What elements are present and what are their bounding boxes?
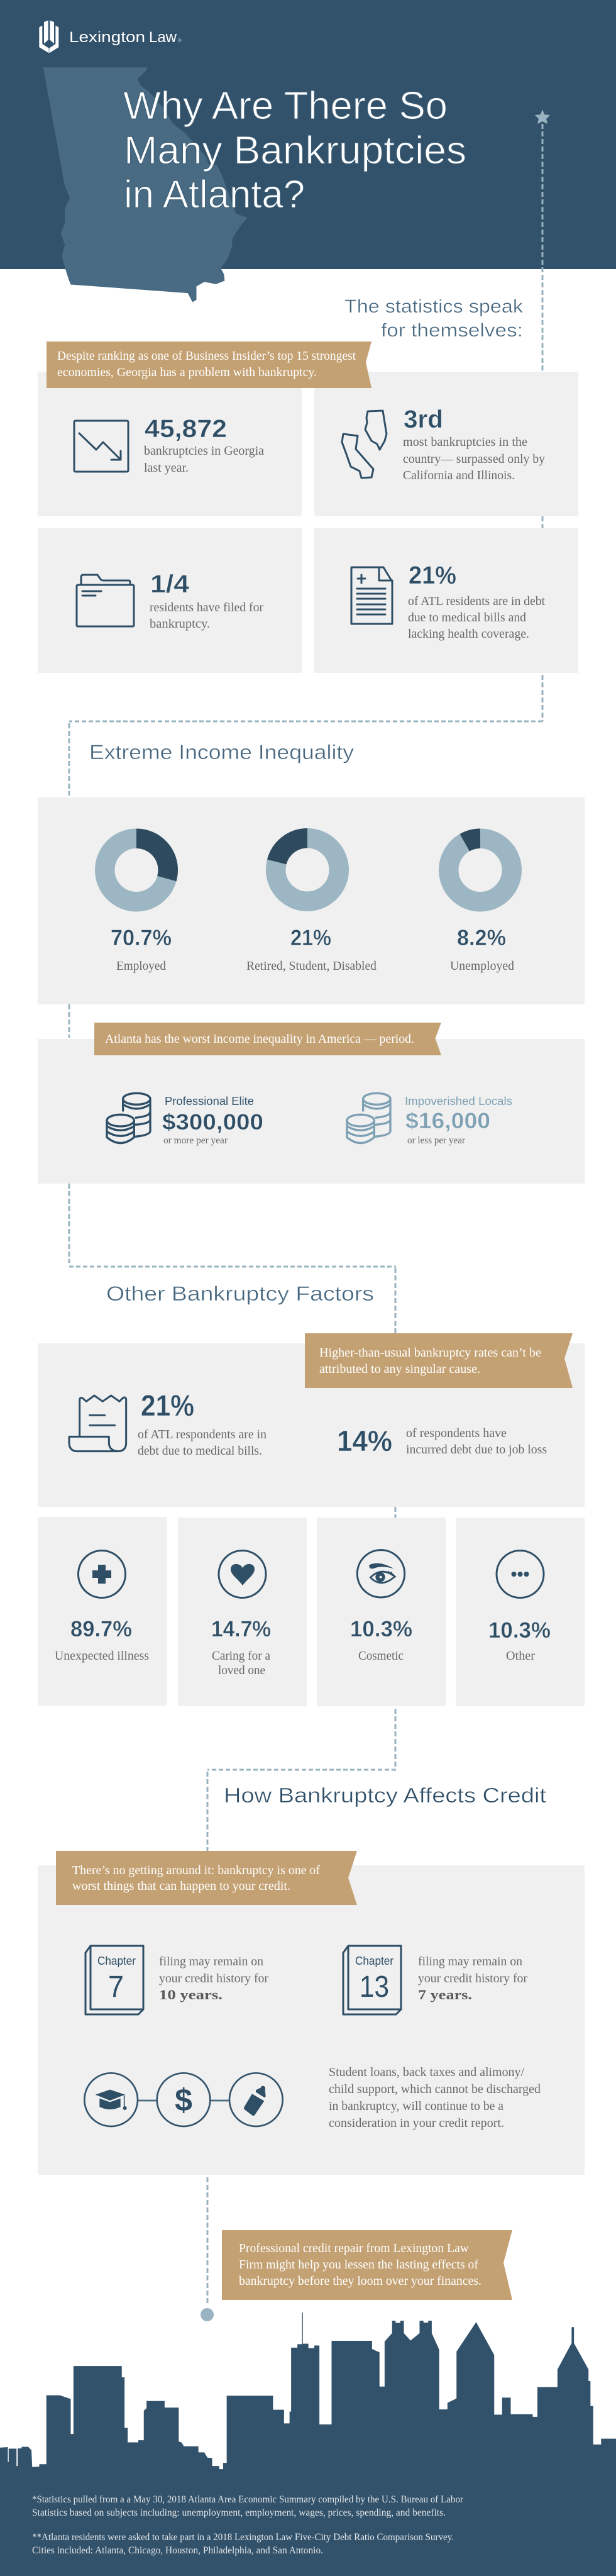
text: Impoverished Locals: Impoverished Locals	[405, 1095, 512, 1108]
callout: no singular cause	[305, 1333, 573, 1388]
heading: statistics speak	[344, 296, 524, 341]
card: caring for a loved one: loved one	[218, 1663, 265, 1677]
text: most bankruptcies: most bankruptcies in the	[403, 435, 527, 449]
card: cosmetic: 10.3%	[350, 1617, 412, 1641]
text: job loss: incurred debt due to job loss	[406, 1443, 547, 1457]
panel: medical debt stat	[314, 528, 578, 673]
icons: student loans, taxes, child support	[84, 2073, 283, 2126]
title: Why Are There So	[123, 84, 448, 128]
callout: professional credit repair: Professional credit repair from Lexington Law	[239, 2241, 469, 2255]
title: in Atlanta?	[124, 173, 305, 216]
card: unexpected illness: 89.7%	[70, 1617, 132, 1641]
stat: 21% medical: 21%	[141, 1389, 194, 1422]
callout: worst thing for credit: worst things that can happen to your credit.	[72, 1879, 290, 1893]
text: chapter 7 duration: 10 years.	[159, 1987, 223, 2002]
stat: 14% job loss: 14%	[337, 1424, 392, 1457]
card: cosmetic	[317, 1518, 446, 1706]
icon: chapter 7 book: 7	[108, 1970, 124, 2004]
stat: 21%: 21%	[409, 562, 456, 589]
text: most bankruptcies: country— surpassed only by	[403, 452, 546, 466]
text: residents in debt: due to medical bills and	[408, 611, 526, 625]
text: debts not discharged: in bankruptcy, will continue to be a	[329, 2099, 503, 2113]
text: Impoverished Locals: or less per year	[407, 1135, 466, 1146]
card: other	[456, 1518, 585, 1706]
heading: statistics speak: The statistics speak	[344, 296, 524, 317]
callout: professional credit repair	[222, 2230, 512, 2300]
text: job loss: of respondents have	[406, 1426, 507, 1440]
callout: no singular cause: Higher-than-usual bankruptcy rates can’t be	[319, 1346, 541, 1360]
stat: 21% retired: Retired, Student, Disabled	[246, 959, 377, 973]
text: debts not discharged: consideration in your credit report.	[329, 2116, 504, 2130]
stat: 1/4: 1/4	[150, 570, 190, 598]
footnotes: **Atlanta residents were asked to take part in a 2018 Lexington Law Five-City Debt Ratio Comparison Survey.	[32, 2532, 454, 2543]
donut chart: employed	[105, 838, 168, 902]
icon: receipt	[69, 1396, 126, 1452]
text: residents in debt: lacking health coverage.	[408, 627, 529, 641]
text: medical bills	[138, 1428, 267, 1458]
stat: 70.7% employed: Employed	[116, 959, 166, 973]
text: bankruptcies in Georgia: last year.	[144, 461, 189, 475]
stat: 21% retired	[246, 926, 377, 973]
stat: 8.2% unemployed	[450, 926, 514, 973]
callout: worst income inequality: Atlanta has the worst income inequality in America — period.	[105, 1032, 414, 1046]
logo: Lexington Law	[39, 20, 182, 53]
callout: Georgia has a problem	[47, 341, 371, 388]
footnotes: Cities included: Atlanta, Chicago, Houston, Philadelphia, and San Antonio.	[32, 2545, 323, 2556]
panel: employment donuts	[38, 797, 585, 1004]
icon: star	[535, 109, 550, 124]
text: most bankruptcies	[403, 435, 546, 482]
stat: 8.2% unemployed: 8.2%	[457, 926, 506, 950]
text: job loss	[406, 1426, 547, 1457]
callout: no singular cause: attributed to any singular cause.	[319, 1362, 480, 1376]
text: chapter 7 duration	[159, 1955, 268, 2002]
stat: 8.2% unemployed: Unemployed	[450, 959, 514, 973]
panel: credit effects	[38, 1865, 585, 2175]
title: Many Bankruptcies	[124, 129, 466, 172]
callout: worst income inequality	[94, 1023, 441, 1055]
icon: medical document	[351, 567, 392, 624]
text: chapter 7 duration: filing may remain on	[159, 1955, 263, 1968]
panel: one in four residents	[38, 528, 302, 673]
text: residents have filed	[150, 601, 263, 631]
map of Georgia	[43, 67, 248, 302]
card: caring for a loved one: 14.7%	[211, 1617, 271, 1641]
text: bankruptcies in Georgia	[144, 444, 264, 475]
icon: chapter 13 book	[343, 1946, 401, 2014]
text: bankruptcies in Georgia: bankruptcies in Georgia	[144, 444, 264, 458]
footnotes: *Statistics pulled from a a May 30, 2018 Atlanta Area Economic Summary compiled by the U.S. Bureau of Labor	[32, 2494, 464, 2505]
logo: Lexington Law: Lexington	[69, 29, 145, 46]
icon: Illinois and California	[342, 411, 387, 478]
icon: chapter 7 book	[85, 1946, 143, 2014]
icon: falling chart	[74, 421, 128, 472]
text: debts not discharged: child support, which cannot be discharged	[329, 2082, 541, 2096]
stat: 21% retired: 21%	[290, 926, 331, 950]
text: Professional Elite: or more per year	[163, 1135, 228, 1146]
donut chart: unemployed	[449, 838, 512, 902]
text: Professional Elite	[162, 1095, 263, 1146]
callout: Georgia has a problem: economies, Georgia has a problem with bankruptcy.	[57, 365, 317, 379]
text: debts not discharged	[329, 2065, 541, 2130]
icon: three dots	[497, 1551, 544, 1597]
card: other: Other	[506, 1649, 535, 1663]
card: cosmetic: Cosmetic	[358, 1649, 404, 1663]
card: unexpected illness	[38, 1517, 167, 1706]
card: caring for a loved one: Caring for a	[212, 1649, 270, 1663]
footnotes: Statistics based on subjects including: unemployment, employment, wages, prices, spending, and benefits.	[32, 2507, 446, 2518]
text: medical bills: debt due to medical bills.	[138, 1444, 262, 1458]
text: residents have filed: residents have filed for	[150, 601, 263, 614]
text: residents in debt: of ATL residents are in debt	[408, 594, 545, 608]
text: Professional Elite: $300,000	[162, 1110, 263, 1135]
text: Impoverished Locals: $16,000	[405, 1109, 490, 1133]
text: medical bills: of ATL respondents are in	[138, 1428, 267, 1441]
footnotes	[32, 2494, 464, 2556]
callout: professional credit repair: Firm might help you lessen the lasting effects of	[239, 2258, 478, 2272]
icons: student loans, taxes, child support: $	[175, 2083, 192, 2118]
icon: eye	[357, 1550, 405, 1597]
text: residents in debt	[408, 594, 545, 641]
icon: chapter 13 book: 13	[360, 1970, 389, 2004]
stat: 45,872: 45,872	[145, 415, 227, 443]
text: chapter 13 duration: your credit history for	[418, 1972, 527, 1985]
stat: 70.7% employed	[111, 926, 172, 973]
card: caring for a loved one	[178, 1518, 307, 1706]
donut chart: retired, student, disabled	[276, 838, 339, 901]
icon: chapter 7 book: Chapter	[97, 1955, 136, 1967]
header background	[0, 0, 616, 269]
stat: 3rd: 3rd	[404, 406, 443, 433]
panel: medical bills and job loss	[38, 1343, 585, 1507]
text: chapter 13 duration: filing may remain on	[418, 1955, 522, 1968]
panel: income comparison	[38, 1039, 585, 1184]
icon: end dot	[201, 2308, 214, 2321]
heading: statistics speak: for themselves:	[381, 320, 523, 341]
Atlanta skyline footer	[0, 2312, 616, 2576]
heading: Extreme Income Inequality: Extreme Income Inequality	[89, 741, 354, 763]
text: residents have filed: bankruptcy.	[150, 617, 210, 631]
text: debts not discharged: Student loans, back taxes and alimony/	[329, 2065, 524, 2079]
icon: coins light	[347, 1093, 390, 1143]
text: chapter 7 duration: your credit history for	[159, 1972, 268, 1985]
stat: 70.7% employed: 70.7%	[111, 926, 172, 950]
icon: chapter 13 book: Chapter	[355, 1955, 393, 1967]
text: chapter 13 duration	[418, 1955, 527, 2002]
card: other: 10.3%	[488, 1618, 551, 1643]
text: most bankruptcies: California and Illinois.	[403, 469, 515, 482]
icon: folder	[77, 575, 134, 626]
panel: Georgia bankruptcies stat	[38, 372, 302, 516]
callout: worst thing for credit	[56, 1851, 357, 1905]
dashed path connecting the sections	[69, 124, 542, 2303]
callout: Georgia has a problem: Despite ranking as one of Business Insider’s top 15 strongest	[57, 349, 356, 363]
logo: Lexington Law: Law	[149, 29, 177, 46]
callout: worst thing for credit: There’s no getting around it: bankruptcy is one of	[72, 1863, 320, 1877]
icon: coins dark	[107, 1093, 150, 1143]
icon: medical cross	[78, 1551, 126, 1597]
heading: Other Bankruptcy Factors: Other Bankruptcy Factors	[106, 1282, 374, 1305]
logo: Lexington Law: ®	[178, 38, 182, 43]
text: Professional Elite: Professional Elite	[165, 1095, 254, 1108]
card: unexpected illness: Unexpected illness	[55, 1649, 149, 1663]
icon: heart	[219, 1551, 266, 1597]
text: Impoverished Locals	[405, 1095, 512, 1146]
panel: third most bankruptcies	[314, 372, 578, 516]
callout: professional credit repair: bankruptcy before they loom over your finances.	[239, 2274, 481, 2288]
text: chapter 13 duration: 7 years.	[418, 1987, 472, 2002]
title	[123, 84, 466, 216]
heading: How Bankruptcy Affects Credit: How Bankruptcy Affects Credit	[224, 1784, 546, 1807]
